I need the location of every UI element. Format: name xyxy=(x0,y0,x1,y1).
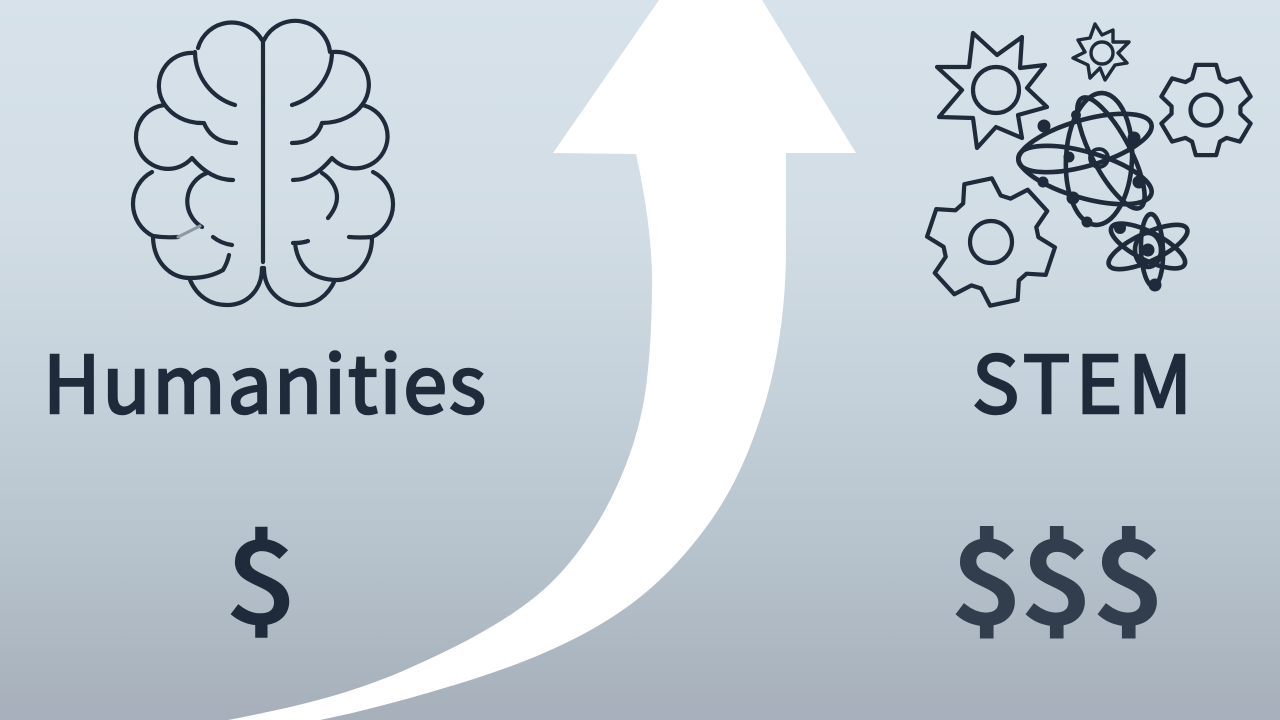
symbol: triple dollar xyxy=(952,492,1162,654)
heading: Humanities: Humanities xyxy=(43,321,486,436)
symbol: triple dollar: $ xyxy=(1022,492,1090,654)
brain crease xyxy=(178,226,200,237)
icon: large bottom gear xyxy=(918,169,1064,315)
icon: large sun gear xyxy=(937,33,1047,148)
heading: STEM: STEM xyxy=(972,321,1192,436)
brain centre divide xyxy=(261,40,265,262)
icon: right gear xyxy=(1161,65,1251,155)
symbol: triple dollar: $ xyxy=(952,492,1020,654)
brain right hemisphere xyxy=(264,21,393,305)
arrow: rising white curved arrow xyxy=(228,0,856,720)
brain left hemisphere xyxy=(133,22,262,305)
icon group: STEM gears and atoms xyxy=(918,24,1251,315)
icon: central atom xyxy=(1012,89,1158,228)
icon: small atom xyxy=(1103,214,1193,292)
icon: brain xyxy=(133,21,393,305)
icon: small sun gear xyxy=(1073,24,1129,80)
symbol: single dollar: $ xyxy=(226,493,296,655)
symbol: triple dollar: $ xyxy=(1094,492,1162,654)
